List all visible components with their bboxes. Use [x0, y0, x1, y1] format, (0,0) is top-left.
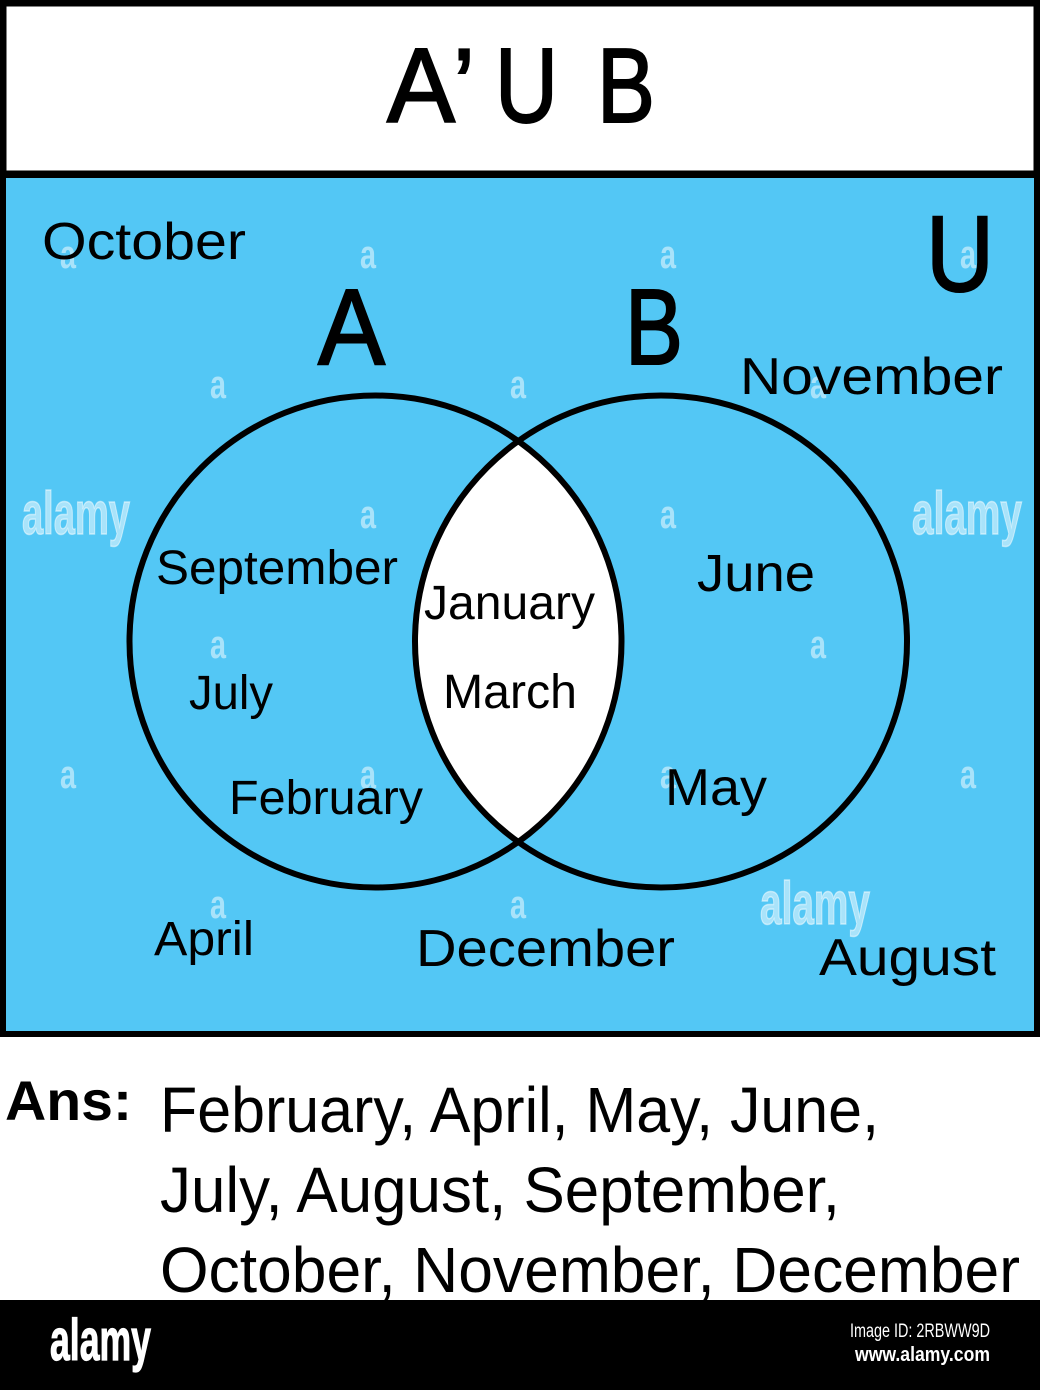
month: December: December: [416, 920, 675, 978]
month: February: February: [229, 772, 423, 825]
title text: B: [597, 27, 655, 145]
footer logo: alamy: [50, 1308, 151, 1373]
title text: A: [387, 27, 455, 145]
title text: U: [495, 27, 558, 145]
month: August: August: [819, 929, 997, 987]
circle B: [415, 396, 907, 888]
watermark pattern: a: [960, 233, 977, 277]
month: January: January: [424, 577, 595, 630]
watermark pattern: alamy: [760, 870, 870, 937]
month: November: November: [740, 348, 1003, 406]
watermark pattern: a: [210, 623, 227, 667]
watermark pattern: a: [660, 493, 677, 537]
month: April: April: [154, 913, 254, 966]
title text: ’: [453, 27, 475, 145]
watermark pattern: a: [510, 363, 527, 407]
title text: [387, 27, 655, 145]
watermark pattern: a: [360, 493, 377, 537]
month: March: March: [443, 666, 577, 719]
image id: Image ID: 2RBWW9D: [850, 1321, 990, 1342]
watermark pattern: a: [210, 883, 227, 927]
month: May: May: [665, 759, 767, 817]
watermark pattern: a: [810, 623, 827, 667]
answer text: [160, 1074, 1020, 1306]
watermark pattern: a: [60, 233, 77, 277]
watermark pattern: alamy: [22, 480, 130, 547]
watermark pattern: a: [810, 363, 827, 407]
universal set panel: [3, 175, 1037, 1034]
watermark pattern: a: [660, 753, 677, 797]
watermark pattern: a: [660, 233, 677, 277]
watermark pattern: [22, 233, 1022, 937]
set label U: U: [926, 193, 994, 314]
watermark pattern: a: [510, 883, 527, 927]
website: www.alamy.com: [854, 1344, 990, 1366]
footer bar: [0, 1300, 1040, 1390]
watermark pattern: a: [360, 233, 377, 277]
month: June: June: [697, 545, 815, 603]
answer text: October, November, December: [160, 1234, 1020, 1306]
month: July: July: [189, 667, 273, 720]
month: October: October: [42, 213, 246, 271]
watermark pattern: a: [960, 753, 977, 797]
watermark pattern: a: [60, 753, 77, 797]
watermark pattern: a: [360, 753, 377, 797]
set label B: B: [625, 266, 683, 387]
watermark pattern: a: [210, 363, 227, 407]
circle A: [130, 396, 622, 888]
answer text: July, August, September,: [160, 1154, 840, 1226]
venn intersection: A and B: [415, 441, 621, 841]
month: September: September: [156, 542, 398, 595]
title panel: [3, 3, 1037, 174]
answer label: Ans:: [5, 1069, 132, 1132]
set label A: A: [318, 266, 385, 387]
answer text: February, April, May, June,: [160, 1074, 879, 1146]
